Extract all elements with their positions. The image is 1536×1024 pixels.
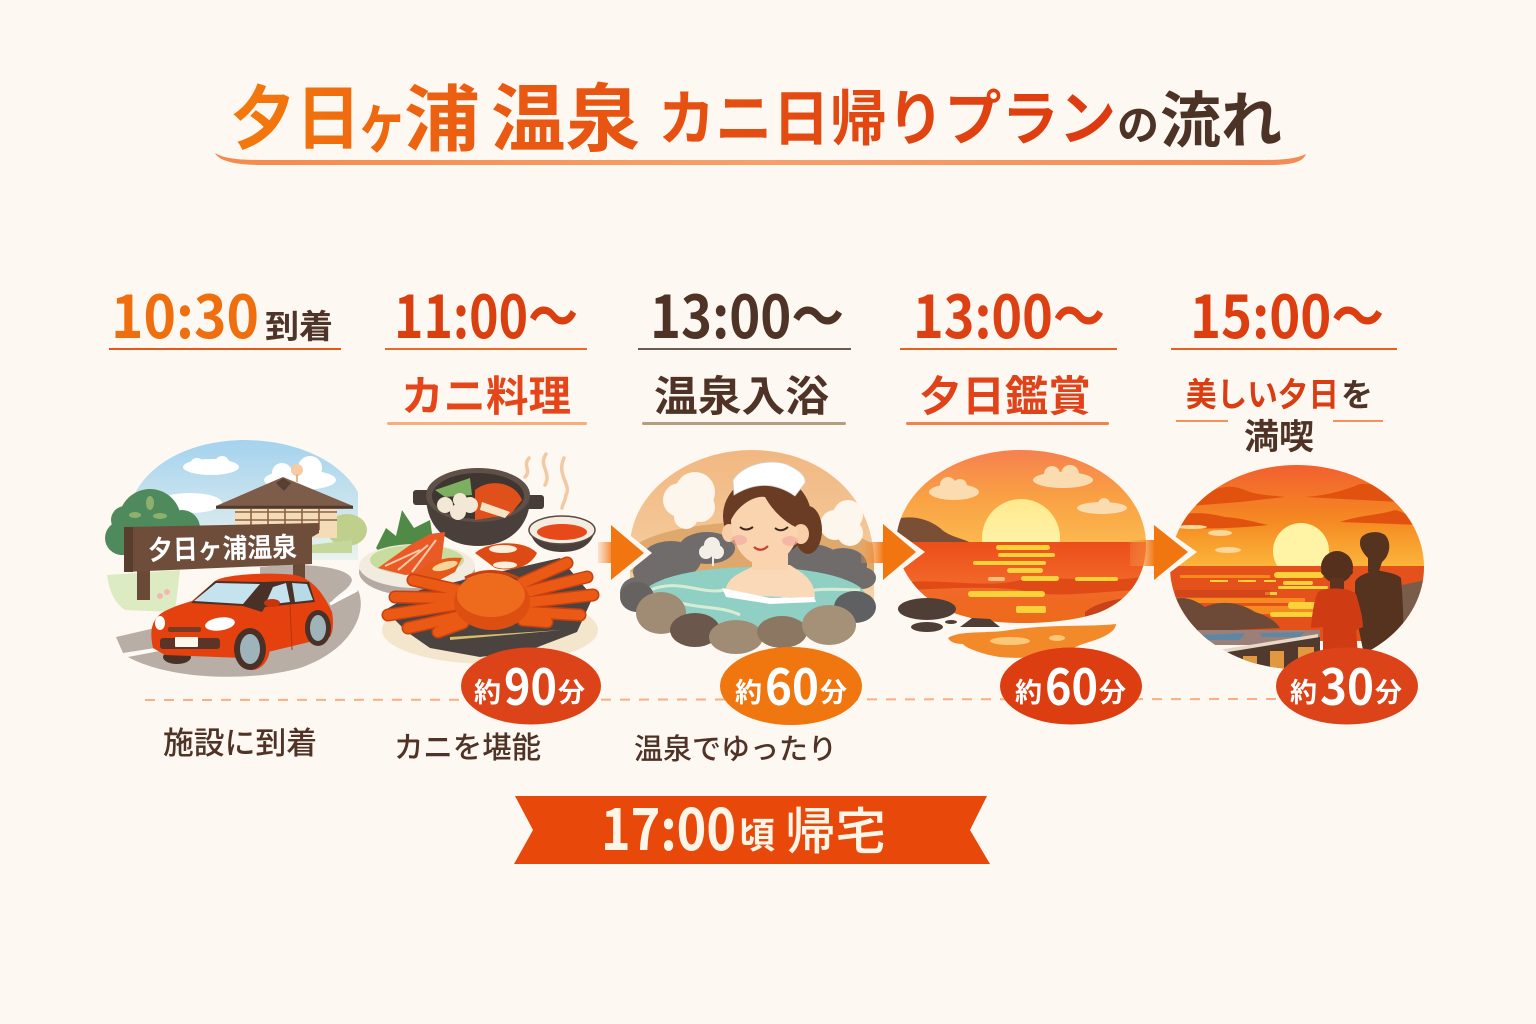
caption: relax in onsen: 温泉でゆったり — [634, 726, 837, 768]
banner: return home around 17:00: 17:00 — [601, 785, 736, 867]
caption: enjoy crab: カニを堪能 — [394, 723, 541, 767]
steam clouds — [663, 472, 863, 546]
dashed timeline — [145, 699, 1280, 700]
sky — [1168, 464, 1426, 568]
sun glints — [968, 545, 1118, 613]
hotel building — [235, 506, 337, 538]
title: 夕日 — [230, 63, 361, 164]
step 1 heading: 10:30 arrival: 到着 — [265, 300, 333, 348]
step 5 heading: 15:00 enjoy sunset: を — [1341, 370, 1373, 416]
crab claw pieces — [475, 543, 537, 569]
title: 浦 — [404, 61, 480, 166]
step 1 heading: 10:30 arrival — [109, 270, 341, 355]
title — [215, 60, 1306, 167]
step 2 heading: 11:00 crab meal: カニ料理 — [401, 363, 571, 424]
woman — [722, 462, 822, 604]
step 1 heading: 10:30 arrival: 10:30 — [111, 270, 259, 355]
headland — [897, 517, 969, 542]
headland — [1170, 598, 1280, 632]
badge: about 60 min: 分 — [820, 671, 847, 710]
rocks — [898, 598, 1000, 632]
step 4 heading: 13:00 sunset viewing: 13:00〜 — [913, 270, 1105, 355]
illustration: couple watching sunset — [1168, 464, 1426, 672]
illustration: crab feast — [359, 454, 598, 664]
woman — [1321, 570, 1353, 575]
step 5 heading: 15:00 enjoy sunset: 満喫 — [1244, 409, 1314, 460]
car — [151, 574, 333, 670]
step 5 heading: 15:00 enjoy sunset: 15:00〜 — [1190, 270, 1384, 355]
step 5 heading: 15:00 enjoy sunset: 美しい夕日 — [1186, 368, 1339, 416]
banner: return home around 17:00 — [514, 785, 990, 867]
badge: about 90 min: 約 — [474, 671, 501, 710]
front rocks — [620, 582, 876, 654]
badge: about 30 min — [1276, 648, 1418, 724]
step 5 heading: 15:00 enjoy sunset — [1171, 270, 1397, 460]
beach water — [1185, 630, 1320, 645]
arrow: step 3 to 4 — [861, 519, 925, 586]
clouds — [1172, 484, 1420, 528]
road — [128, 565, 361, 677]
shoreline reflection — [948, 624, 1116, 658]
badge: about 60 min: 約 — [735, 671, 762, 710]
water — [642, 567, 866, 627]
badge: about 60 min: 60 — [765, 648, 819, 720]
steam — [525, 454, 567, 508]
man — [1355, 570, 1404, 650]
wooden sign: 夕日ヶ浦温泉 — [148, 525, 297, 568]
ground — [327, 514, 367, 546]
title: の — [1117, 92, 1159, 153]
badge: about 90 min: 分 — [558, 671, 585, 710]
back rocks — [620, 532, 876, 609]
tree — [105, 489, 200, 555]
banner: return home around 17:00: 頃 — [739, 807, 775, 859]
step 4 heading: 13:00 sunset viewing — [900, 270, 1117, 425]
title: 流れ — [1160, 71, 1282, 160]
sea — [903, 542, 1146, 623]
sea — [1168, 566, 1426, 641]
badge: about 30 min: 分 — [1375, 671, 1402, 710]
step 3 heading: 13:00 onsen bath — [638, 270, 851, 425]
title underline swoosh — [215, 153, 1306, 165]
sauce bowl — [529, 516, 595, 552]
wooden sign — [124, 523, 319, 600]
step 2 heading: 11:00 crab meal: 11:00〜 — [394, 270, 578, 355]
title: カニ日帰りプラン — [658, 71, 1116, 158]
title: 温泉 — [491, 60, 640, 167]
sky — [133, 440, 358, 560]
badge: about 60 min — [720, 647, 862, 725]
hot pot — [413, 468, 544, 546]
step 4 heading: 13:00 sunset viewing: 夕日鑑賞 — [919, 363, 1091, 424]
step 2 heading: 11:00 crab meal — [385, 270, 587, 425]
badge: about 60 min: 60 — [1045, 648, 1098, 720]
crab — [388, 563, 593, 632]
sashimi plate — [359, 510, 475, 596]
badge: about 90 min — [461, 648, 601, 724]
step 3 heading: 13:00 onsen bath: 13:00〜 — [650, 270, 844, 355]
sun — [1273, 523, 1329, 566]
arrow: step 4 to 5 — [1130, 520, 1197, 586]
illustration: woman in onsen — [620, 448, 885, 654]
badge: about 60 min — [1000, 648, 1142, 724]
grill plate — [382, 596, 598, 664]
sun — [982, 499, 1060, 542]
badge: about 30 min: 約 — [1290, 671, 1317, 710]
illustration: sunset over the sea — [890, 448, 1152, 658]
right cliff — [1402, 580, 1423, 624]
badge: about 60 min: 分 — [1099, 671, 1126, 710]
title: ヶ — [357, 70, 407, 166]
railing — [1222, 634, 1318, 656]
badge: about 60 min: 約 — [1015, 671, 1042, 710]
caption: arrive at facility: 施設に到着 — [163, 718, 317, 763]
warm backdrop — [628, 448, 876, 603]
step 3 heading: 13:00 onsen bath: 温泉入浴 — [654, 363, 829, 424]
badge: about 90 min: 90 — [504, 648, 557, 720]
small steam puff — [699, 537, 724, 566]
clouds — [929, 465, 1127, 514]
flowers — [157, 589, 170, 599]
badge: about 30 min: 30 — [1320, 648, 1374, 720]
illustration: arrival by car at onsen — [105, 440, 367, 677]
arrow: step 2 to 3 — [598, 520, 652, 586]
sky — [890, 448, 1152, 543]
banner: return home around 17:00: 帰宅 — [785, 792, 886, 864]
